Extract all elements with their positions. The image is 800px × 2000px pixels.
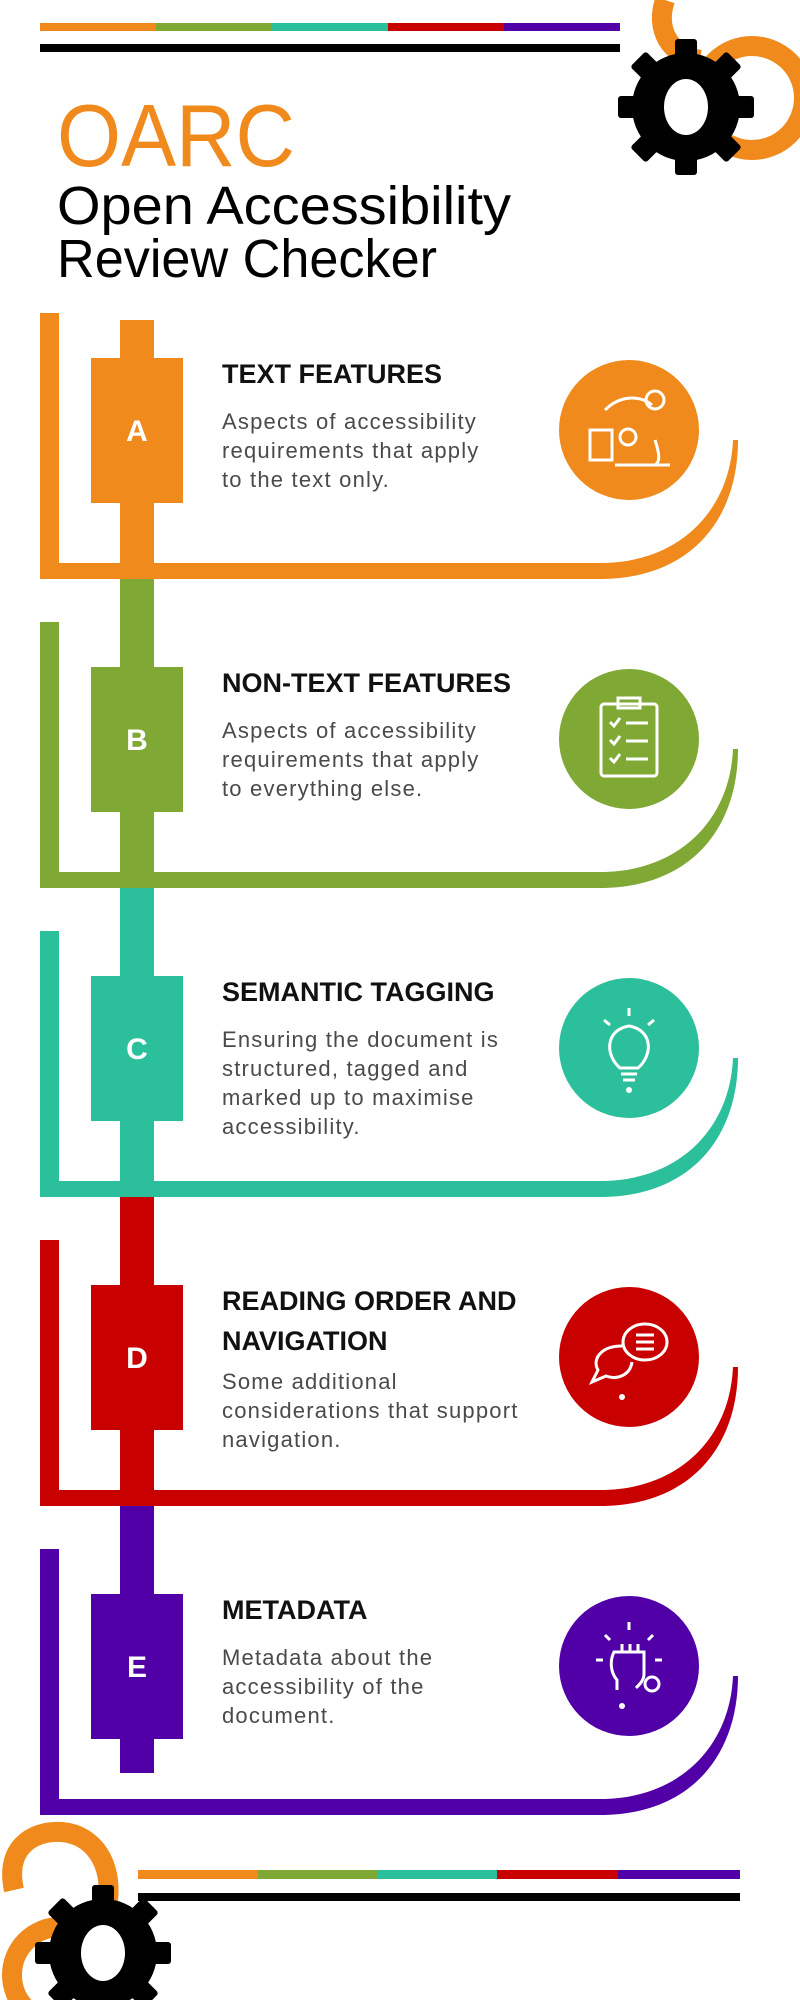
icon B: [559, 669, 699, 809]
panel D: reading order and navigation: NAVIGATION: [222, 1326, 388, 1356]
title: Open Accessibility Review Checker: Open Accessibility: [57, 176, 511, 236]
top black line: [40, 44, 620, 52]
icon: gear bottom: [35, 1885, 171, 2000]
panel C: semantic tagging: [40, 888, 738, 1197]
bottom color stripe: [138, 1870, 740, 1879]
body A: Aspects of accessibility: [222, 409, 477, 434]
panel E: metadata: document.: [222, 1703, 336, 1728]
panel D: reading order and navigation: navigation.: [222, 1427, 342, 1452]
top decoration: orange rings: [662, 0, 800, 150]
icon E: [559, 1596, 699, 1736]
heading A: TEXT FEATURES: [222, 359, 442, 389]
panel D: reading order and navigation: D: [126, 1342, 148, 1375]
heading C: SEMANTIC TAGGING: [222, 977, 494, 1007]
panel C: semantic tagging: marked up to maximise: [222, 1085, 475, 1110]
panel E: metadata: E: [127, 1651, 147, 1684]
panel C: semantic tagging: accessibility.: [222, 1114, 361, 1139]
title: Open Accessibility Review Checker: [57, 176, 511, 289]
icon A: [559, 360, 699, 500]
body C: Ensuring the document is: [222, 1027, 499, 1052]
panel B: non-text features: B: [126, 724, 148, 757]
body B: Aspects of accessibility: [222, 718, 477, 743]
panel B: non-text features: to everything else.: [222, 776, 423, 801]
panel C: semantic tagging: structured, tagged and: [222, 1056, 469, 1081]
body E: Metadata about the: [222, 1645, 433, 1670]
icon: gear top: [618, 39, 754, 175]
panel A: text features: [40, 313, 738, 579]
panel B: non-text features: [40, 579, 738, 888]
panel E: metadata: [40, 1506, 738, 1815]
panel B: non-text features: requirements that apply: [222, 747, 480, 772]
heading E: METADATA: [222, 1595, 367, 1625]
bottom black line: [138, 1893, 740, 1901]
panel E: metadata: accessibility of the: [222, 1674, 425, 1699]
title: OARC: OARC: [57, 86, 295, 185]
panel A: text features: requirements that apply: [222, 438, 480, 463]
title: Open Accessibility Review Checker: Review Checker: [57, 229, 437, 289]
panel D: reading order and navigation: considerations that support: [222, 1398, 519, 1423]
panel A: text features: to the text only.: [222, 467, 390, 492]
body D: Some additional: [222, 1369, 398, 1394]
heading D: READING ORDER AND: [222, 1286, 517, 1316]
heading B: NON-TEXT FEATURES: [222, 668, 511, 698]
bottom decoration: orange rings: [12, 1832, 109, 2000]
icon C: [559, 978, 699, 1118]
icon D: [559, 1287, 699, 1427]
panel A: text features: A: [126, 415, 148, 448]
panel D: reading order and navigation: [40, 1197, 738, 1506]
panel C: semantic tagging: C: [126, 1033, 148, 1066]
top color stripe: [40, 23, 620, 31]
